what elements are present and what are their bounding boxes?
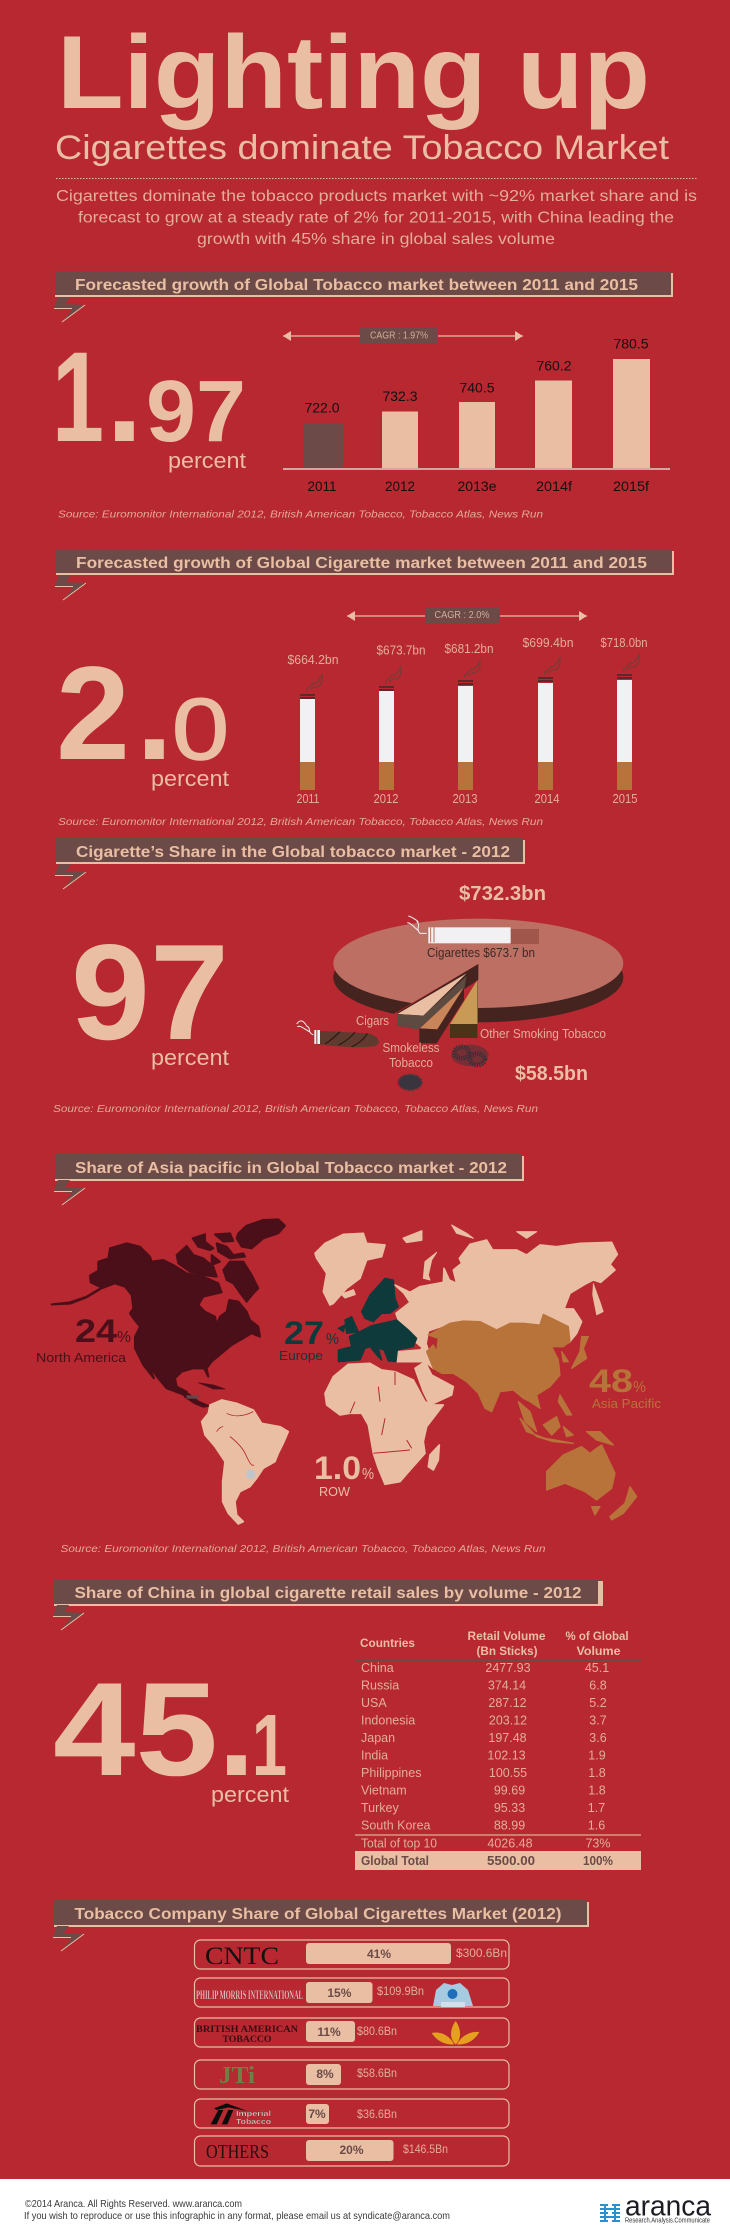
total row: 73% <box>585 1836 611 1850</box>
bar chart: 780.5 <box>614 336 648 352</box>
panel: Asia Pacific share <box>36 1154 661 1555</box>
table header: % of Global <box>566 1629 628 1643</box>
pie labels: Tobacco <box>389 1055 433 1070</box>
bar chart: 2015f <box>613 479 649 494</box>
table rows: Philippines <box>361 1766 421 1780</box>
intro text: growth with 45% share in global sales volume <box>197 231 555 248</box>
section heading <box>55 549 674 600</box>
source: Source: Euromonitor International 2012, British American Tobacco, Tobacco Atlas, News Run <box>58 816 543 828</box>
big number: percent <box>168 448 246 473</box>
panel: global tobacco market growth <box>52 271 673 520</box>
cigarette 2012 <box>379 667 401 790</box>
label: ROW <box>314 1450 374 1499</box>
total row: Total of top 10 <box>361 1836 437 1850</box>
big number: percent <box>211 1782 289 1807</box>
section heading <box>53 1900 589 1951</box>
intro text <box>56 188 697 248</box>
cigarette bar chart: 2012 <box>374 791 398 806</box>
table rows: 88.99 <box>494 1818 525 1832</box>
row: Others <box>194 2136 509 2166</box>
big number <box>53 1656 289 1807</box>
section heading: Cigarette’s Share in the Global tobacco market - 2012 <box>76 844 510 861</box>
row: Others: 20% <box>339 2143 364 2157</box>
row: CNTC: $300.6Bn <box>456 1946 507 1960</box>
table rows: 45.1 <box>585 1661 609 1675</box>
bar chart: 722.0 <box>304 400 340 416</box>
section heading: Forecasted growth of Global Tobacco market between 2011 and 2015 <box>75 277 638 294</box>
source: Source: Euromonitor International 2012, British American Tobacco, Tobacco Atlas, News Run <box>60 1543 546 1555</box>
table header <box>360 1629 628 1658</box>
cigarette 2015 <box>617 655 639 790</box>
label: Europe <box>279 1315 339 1363</box>
cigarette bar chart: $718.0bn <box>600 635 648 650</box>
table rows: 102.13 <box>487 1749 526 1763</box>
row: British American Tobacco: $80.6Bn <box>357 2024 397 2038</box>
map: Asia Pacific <box>427 1314 637 1520</box>
label: North America: % <box>117 1329 131 1346</box>
table rows: Russia <box>361 1679 399 1693</box>
wedge: cigars <box>397 964 478 1029</box>
wedge: smokeless tobacco <box>419 987 464 1043</box>
copyright text: If you wish to reproduce or use this infographic in any format, please email us at syndicate@aranca.com <box>24 2210 450 2222</box>
pie chart <box>297 916 623 1090</box>
label: Asia Pacific: Asia Pacific <box>592 1396 661 1411</box>
label: Europe: % <box>326 1331 339 1348</box>
total value: $732.3bn <box>459 883 546 905</box>
table rows: 6.8 <box>589 1679 607 1693</box>
table rows: 3.7 <box>589 1714 607 1728</box>
label: North America: North America <box>36 1350 127 1365</box>
big number: 0 <box>172 681 229 778</box>
table rows: 1.6 <box>588 1818 605 1832</box>
bar chart: 760.2 <box>536 358 572 374</box>
cigarette bar chart: 2014 <box>534 791 560 806</box>
table rows: 287.12 <box>488 1696 527 1710</box>
bar chart: 732.3 <box>382 389 418 404</box>
map: North America <box>52 1219 285 1407</box>
bar chart: 2011 <box>308 479 336 494</box>
table rows: South Korea <box>361 1818 431 1832</box>
row: Philip Morris International: PHILIP MORRIS INTERNATIONAL <box>196 1987 303 2002</box>
big number <box>56 640 229 791</box>
row: CNTC: CNTC <box>205 1943 279 1970</box>
big number: 45 <box>53 1656 218 1804</box>
table rows: 3.6 <box>589 1731 607 1745</box>
pie labels: Smokeless <box>382 1040 440 1055</box>
label: Asia Pacific: % <box>633 1379 646 1396</box>
data table <box>355 1629 641 1870</box>
label: Europe: 27 <box>284 1315 324 1351</box>
row: British American Tobacco <box>194 2018 509 2047</box>
table rows: 197.48 <box>488 1731 527 1745</box>
total row <box>361 1836 611 1850</box>
intro text: Cigarettes dominate the tobacco products market with ~92% market share and is <box>56 188 697 205</box>
section heading <box>53 1579 603 1630</box>
bar chart <box>283 336 670 494</box>
total row: 4026.48 <box>487 1836 533 1850</box>
map: Europe <box>338 1278 417 1362</box>
global total row: 5500.00 <box>487 1854 535 1868</box>
cigarette bar chart: 2013 <box>452 791 478 806</box>
table header: Retail Volume <box>468 1629 546 1643</box>
big number: 97 <box>146 363 246 460</box>
table rows: Vietnam <box>361 1784 407 1798</box>
big number: . <box>218 1656 255 1804</box>
cigarette 2014 <box>538 658 560 790</box>
icon: cigar <box>297 1021 379 1047</box>
row: CNTC <box>194 1940 509 1970</box>
table header: (Bn Sticks) <box>476 1644 538 1658</box>
global total row: Global Total <box>361 1854 429 1868</box>
pie labels: Cigarettes $673.7 bn <box>427 945 535 960</box>
source: Source: Euromonitor International 2012, British American Tobacco, Tobacco Atlas, News Run <box>58 508 543 520</box>
section heading: Forecasted growth of Global Cigarette market between 2011 and 2015 <box>76 555 647 572</box>
map: South America <box>202 1400 288 1524</box>
row: JTI: 8% <box>316 2067 334 2081</box>
big number: 1 <box>52 326 104 469</box>
table rows: 1.9 <box>588 1749 606 1763</box>
big number: 1 <box>252 1697 287 1794</box>
panel: China share <box>53 1579 641 1870</box>
table rows: Indonesia <box>361 1714 415 1728</box>
row: Imperial Tobacco: Tobacco <box>236 2119 271 2126</box>
icon: smokeless tobacco <box>399 1075 421 1090</box>
panel: global cigarette market growth <box>55 549 674 828</box>
logo: aranca: aranca <box>625 2190 712 2222</box>
label: ROW: ROW <box>319 1484 351 1499</box>
big number <box>52 322 246 473</box>
intro text: forecast to grow at a steady rate of 2% for 2011-2015, with China leading the <box>78 210 674 226</box>
table rows: 5.2 <box>589 1696 607 1710</box>
panel: cigarette share <box>53 838 623 1115</box>
section heading: Share of China in global cigarette retail sales by volume - 2012 <box>74 1585 582 1602</box>
row: Imperial Tobacco: Imperial <box>236 2111 271 2118</box>
subtitle: Cigarettes dominate Tobacco Market <box>55 129 670 167</box>
table header: Countries <box>360 1636 415 1650</box>
label: Asia Pacific: 48 <box>589 1363 633 1399</box>
big number: 97 <box>71 916 229 1068</box>
label: ROW: 1.0 <box>314 1450 361 1486</box>
big number: 2 <box>56 640 130 788</box>
table rows: Turkey <box>361 1801 399 1815</box>
table rows: 1.7 <box>588 1801 605 1815</box>
table rows: 374.14 <box>488 1679 526 1693</box>
CAGR arrow: CAGR : 2.0% <box>434 610 490 621</box>
table rows: 1.8 <box>588 1766 606 1780</box>
section heading <box>55 838 525 889</box>
label: Asia Pacific <box>589 1363 661 1411</box>
row: Philip Morris International: 15% <box>327 1986 352 2000</box>
icon: loose tobacco <box>451 1045 489 1066</box>
icon: PMI crest <box>433 1983 473 2007</box>
table rows: 2477.93 <box>485 1661 531 1675</box>
row: Others: OTHERS <box>206 2141 269 2163</box>
pie labels: Cigars <box>356 1013 389 1028</box>
table header: Volume <box>576 1644 621 1658</box>
title: Lighting up <box>57 15 650 131</box>
cigarette 2011 <box>300 675 322 790</box>
icon: Imperial Tobacco mark <box>211 2103 247 2124</box>
row: British American Tobacco: BRITISH AMERICAN <box>196 2025 298 2035</box>
row: JTI: JTi <box>219 2063 255 2089</box>
table rows: USA <box>361 1696 387 1710</box>
bar chart: 2014f <box>536 479 572 494</box>
table rows: 100.55 <box>489 1766 527 1780</box>
cigarette bar chart: $673.7bn <box>376 643 426 658</box>
label: ROW: % <box>362 1466 374 1483</box>
big number: percent <box>151 766 229 791</box>
row: British American Tobacco: 11% <box>317 2025 341 2039</box>
label: North America <box>36 1313 131 1365</box>
row: Philip Morris International: $109.9Bn <box>377 1984 424 1998</box>
copyright text: ©2014 Aranca. All Rights Reserved. www.aranca.com <box>25 2198 242 2210</box>
map: Greenland, Russia, Africa, Middle East <box>315 1225 617 1484</box>
icon: BAT leaves <box>432 2021 479 2045</box>
icon: cigarette <box>407 916 539 944</box>
panel: company shares <box>53 1900 589 2166</box>
row: Imperial Tobacco: $36.6Bn <box>357 2107 397 2121</box>
cigarette bar chart: $699.4bn <box>522 635 574 650</box>
section heading <box>54 271 673 322</box>
table rows: China <box>361 1661 394 1675</box>
source: Source: Euromonitor International 2012, British American Tobacco, Tobacco Atlas, News Run <box>53 1103 538 1115</box>
CAGR arrow: CAGR : 1.97% <box>370 330 428 342</box>
section heading: Share of Asia pacific in Global Tobacco market - 2012 <box>75 1160 507 1177</box>
row: Imperial Tobacco <box>194 2099 509 2128</box>
table rows: 95.33 <box>494 1801 525 1815</box>
footer <box>0 2179 730 2235</box>
section heading <box>54 1154 524 1205</box>
bar chart: 2013e <box>458 479 496 494</box>
cigarette bar chart: 2011 <box>296 791 320 806</box>
pie labels: Other Smoking Tobacco <box>480 1026 606 1041</box>
big number: . <box>136 640 173 788</box>
label: North America: 24 <box>75 1313 117 1349</box>
cigarette bar chart: $664.2bn <box>288 652 338 667</box>
row: Philip Morris International <box>194 1978 509 2007</box>
pie labels <box>356 945 606 1070</box>
cigarette 2013 <box>458 661 480 790</box>
cigarette bar chart <box>288 635 648 806</box>
big number: percent <box>151 1045 229 1070</box>
global total row <box>355 1851 641 1870</box>
table rows: Japan <box>361 1731 395 1745</box>
label: Europe: Europe <box>279 1348 323 1363</box>
bar chart: 740.5 <box>460 380 494 396</box>
row: Imperial Tobacco: 7% <box>308 2107 326 2121</box>
row: JTI: $58.6Bn <box>357 2066 397 2080</box>
ROW value: $58.5bn <box>515 1063 588 1085</box>
world map <box>52 1219 637 1524</box>
bar chart: 2012 <box>385 479 415 494</box>
row: CNTC: 41% <box>367 1947 391 1961</box>
table rows <box>361 1661 609 1832</box>
table rows: India <box>361 1749 388 1763</box>
big number: . <box>106 322 143 470</box>
global total row: 100% <box>583 1854 613 1868</box>
cigarette bar chart: $681.2bn <box>444 641 494 656</box>
CAGR arrow <box>347 607 587 623</box>
CAGR arrow <box>283 327 523 344</box>
table rows: 1.8 <box>588 1784 606 1798</box>
row: JTI <box>194 2060 509 2089</box>
row: Others: $146.5Bn <box>403 2142 448 2156</box>
section heading: Tobacco Company Share of Global Cigarettes Market (2012) <box>74 1906 562 1923</box>
wedge: other smoking tobacco <box>450 980 477 1038</box>
table rows: 203.12 <box>489 1714 527 1728</box>
row: British American Tobacco: TOBACCO <box>222 2035 272 2045</box>
table rows: 99.69 <box>494 1784 525 1798</box>
copyright text <box>24 2198 450 2222</box>
cigarette bar chart: 2015 <box>612 791 638 806</box>
